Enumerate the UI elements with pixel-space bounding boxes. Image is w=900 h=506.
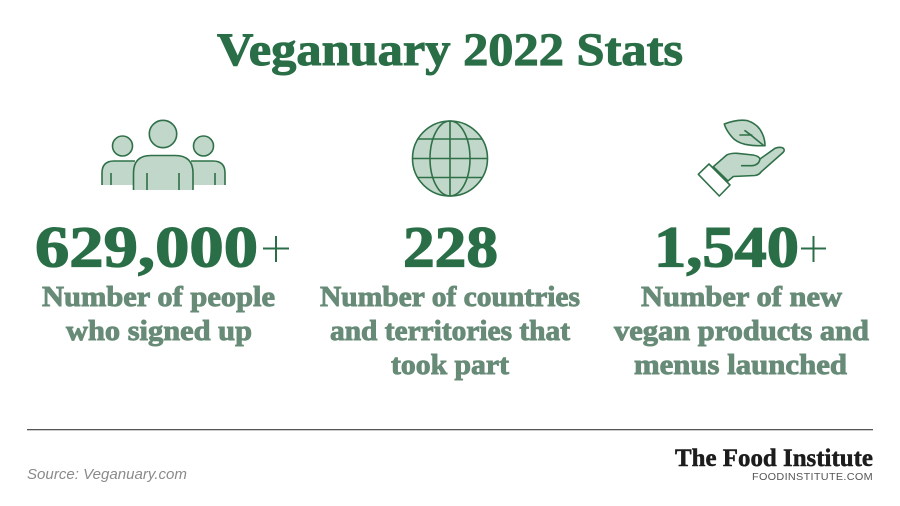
label: products: Number of new [641, 282, 842, 313]
label: people: who signed up [66, 316, 252, 347]
label: people [42, 282, 275, 347]
source note: Source: Veganuary.com [27, 466, 187, 483]
logo: The Food Institute: FOODINSTITUTE.COM [752, 471, 873, 483]
panel: people who signed up [35, 120, 289, 347]
label: products: menus launched [634, 350, 847, 381]
label: countries: took part [391, 350, 510, 381]
stat: 629,000+: 629,000 [35, 214, 258, 280]
title: Veganuary 2022 Stats [217, 24, 683, 76]
label: countries: and territories that [330, 316, 571, 347]
icon: globe [412, 121, 488, 196]
label: products: vegan products and [614, 316, 869, 347]
panel: countries and territories [320, 121, 580, 381]
label: countries: Number of countries [320, 282, 580, 313]
stat: 1,540+: 1,540 [654, 214, 799, 280]
plus sign [801, 236, 826, 262]
label: people: Number of people [42, 282, 275, 313]
icon: people [102, 120, 225, 190]
logo: The Food Institute: The Food Institute [675, 445, 873, 472]
panel: new vegan products [614, 120, 869, 381]
stat: 228: 228 [403, 214, 498, 280]
label: countries [320, 282, 580, 381]
divider [27, 429, 873, 430]
label: products [614, 282, 869, 381]
plus sign [263, 236, 289, 262]
icon: hand and leaf [698, 120, 784, 196]
